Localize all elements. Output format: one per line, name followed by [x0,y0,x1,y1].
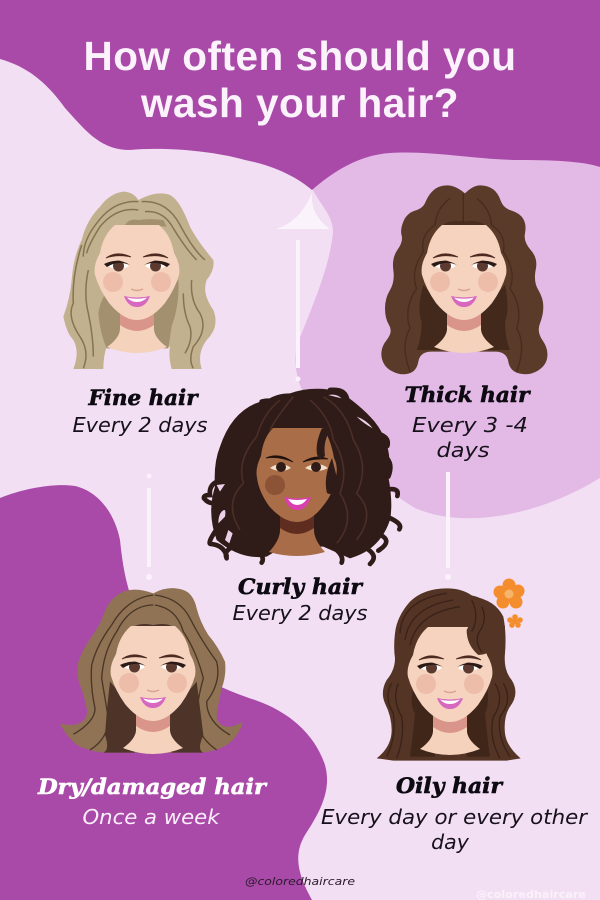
label: dry/damaged hair: Once a week [82,805,221,829]
portrait: curly hair [204,389,400,564]
label: oily hair: Oily hair [396,773,504,798]
label: curly hair [232,574,368,625]
label: fine hair: Fine hair [87,385,199,410]
label: fine hair [72,385,208,437]
label: curly hair: Curly hair [238,574,364,599]
label: thick hair: days [436,438,490,462]
title: wash your hair? [140,80,459,126]
connector: thick to oily [445,472,451,580]
title [84,33,516,126]
portrait: thick hair [381,185,547,374]
icon: orange flowers [494,578,524,628]
arrow: top arrow between fine and thick [276,193,330,382]
portrait: dry/damaged hair [60,588,243,754]
top purple banner [0,0,600,190]
label: oily hair: Every day or every other [321,805,589,829]
label: thick hair [404,382,531,462]
portrait: fine hair [63,192,216,369]
label: dry/damaged hair [37,774,268,829]
title: How often should you [84,33,516,79]
label: curly hair: Every 2 days [232,601,368,625]
portrait: oily hair [377,588,521,761]
connector: fine to dry [146,474,152,580]
label: oily hair [321,773,589,854]
label: thick hair: Every 3 -4 [412,413,528,437]
label: oily hair: day [431,830,470,854]
light purple blob [296,150,600,518]
label: dry/damaged hair: Dry/damaged hair [37,774,268,799]
label: thick hair: Thick hair [404,382,531,407]
bottom-left purple blob [0,485,327,900]
label: fine hair: Every 2 days [72,413,208,437]
credit: coloredhaircare: @coloredhaircare [245,875,355,888]
